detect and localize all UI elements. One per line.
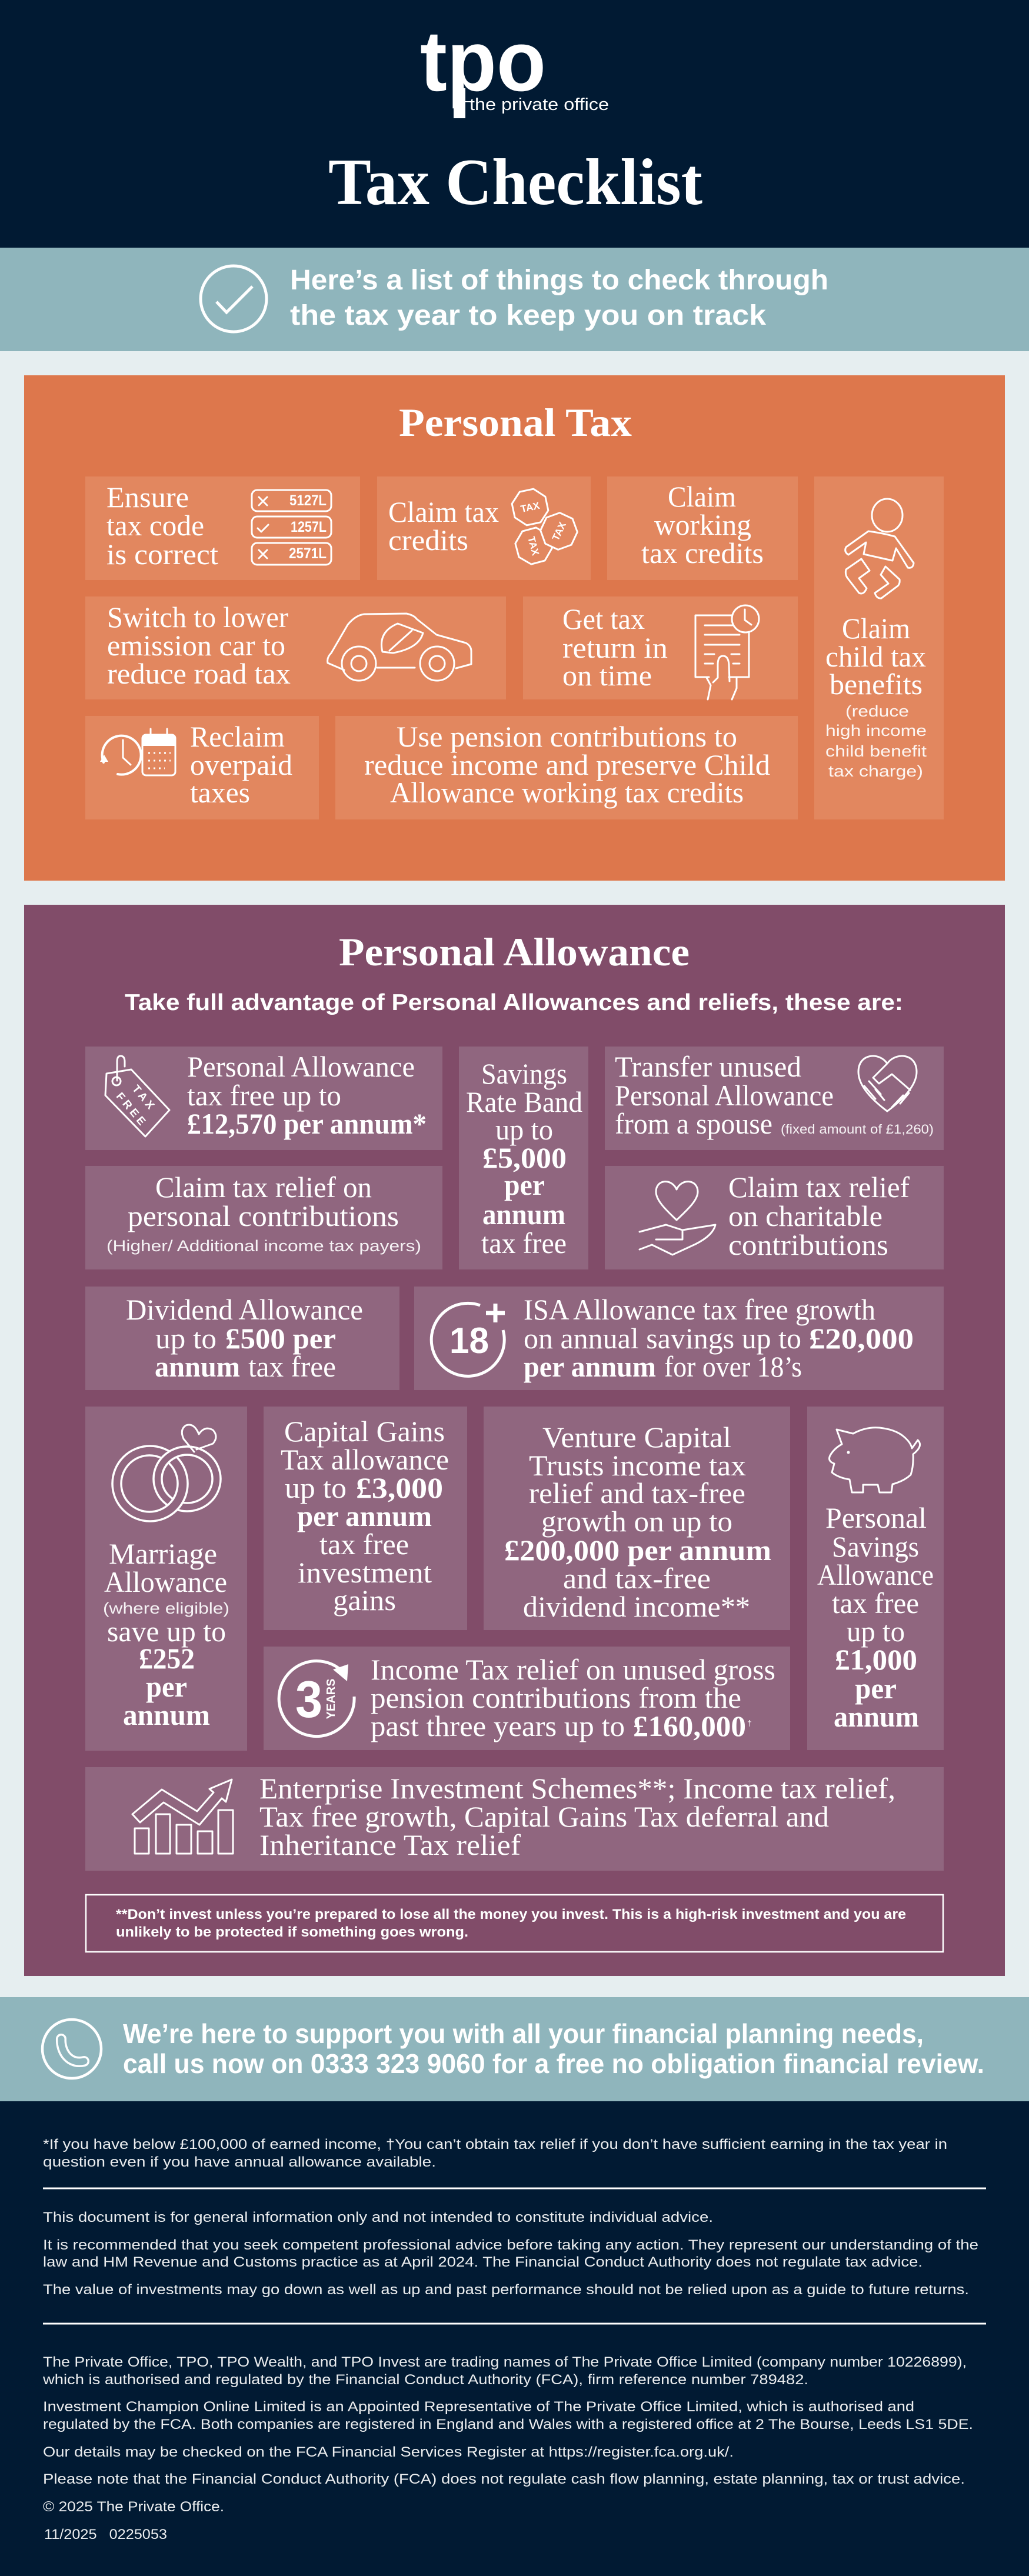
legal text: Please note that the Financial Conduct Authority (FCA) does not regulate cash flow planning, estate planning, tax or trust advice. (43, 2471, 965, 2487)
card: charitable contributions (605, 1166, 944, 1269)
icon: tax code list (252, 490, 331, 565)
card: unused pension relief (264, 1647, 790, 1750)
card: venture capital trusts: growth on up to (541, 1505, 732, 1538)
icon: check circle (201, 266, 267, 332)
card: transfer allowance: from a spouse (615, 1107, 772, 1140)
card: venture capital trusts: £200,000 per annum (504, 1534, 771, 1567)
footnotes: question even if you have annual allowance available. (43, 2154, 436, 2170)
card: transfer allowance: (fixed amount of £1,260) (781, 1122, 934, 1137)
card: tax code (85, 476, 360, 580)
icon: three years (279, 1661, 354, 1737)
card: capital gains allowance: gains (333, 1584, 396, 1617)
card: venture capital trusts: Trusts income tax (529, 1449, 746, 1482)
card: relief on personal contributions: (Higher/ Additional income tax payers) (106, 1237, 421, 1255)
card: child tax benefits: child benefit (825, 742, 927, 760)
card: pension contributions: reduce income and preserve Child (364, 748, 770, 781)
card: isa allowance: per annum (524, 1350, 656, 1383)
card: unused pension relief: past three years up to (371, 1709, 625, 1742)
card: personal savings allowance: up to (847, 1615, 905, 1648)
card: marriage allowance: annum (123, 1698, 210, 1731)
card: unused pension relief: † (747, 1718, 752, 1728)
icon: tax badges: TAX (550, 520, 568, 542)
card: reclaim overpaid taxes (85, 716, 319, 819)
card: child tax benefits: Claim (842, 612, 910, 645)
card: lower emission car: emission car to (107, 629, 285, 662)
card: tax code: is correct (106, 538, 218, 571)
legal text: © 2025 The Private Office. (43, 2499, 224, 2515)
card: savings rate band: Savings (481, 1057, 567, 1090)
card: child tax benefits: benefits (830, 668, 923, 701)
card: capital gains allowance: £3,000 (356, 1471, 443, 1504)
disclaimer: law and HM Revenue and Customs practice as at April 2024. The Financial Conduct Authority does not regulate tax advice. (43, 2254, 923, 2270)
legal text (42, 2354, 973, 2542)
card: capital gains allowance (264, 1407, 467, 1630)
icon: 18 plus (431, 1303, 505, 1376)
card: capital gains allowance: tax free (319, 1528, 409, 1561)
legal text: The Private Office, TPO, TPO Wealth, and TPO Invest are trading names of The Private Office Limited (company number 10226899), (43, 2354, 967, 2370)
card: dividend allowance: tax free (248, 1350, 336, 1383)
card: enterprise investment schemes: Tax free growth, Capital Gains Tax deferral and (259, 1800, 829, 1833)
icon: 18 plus: 18 (449, 1321, 489, 1361)
disclaimer: This document is for general information only and not intended to constitute individual advice. (43, 2210, 713, 2225)
card: working tax credits: working (654, 508, 751, 541)
card: capital gains allowance: investment (298, 1556, 432, 1589)
panel: personal tax (24, 375, 1005, 881)
contact text: We’re here to support you with all your financial planning needs, (123, 2018, 924, 2049)
card: working tax credits: tax credits (641, 536, 764, 569)
disclaimer (43, 2210, 978, 2298)
callout: investment risk warning: **Don’t invest unless you’re prepared to lose all the money you invest. This is a high-risk investment and you are (116, 1907, 906, 1922)
card: enterprise investment schemes: Enterprise Investment Schemes**; Income tax relief, (259, 1772, 895, 1805)
intro text: the tax year to keep you on track (290, 300, 766, 331)
card: working tax credits: Claim (668, 480, 736, 513)
card: venture capital trusts: dividend income** (523, 1590, 750, 1623)
card: dividend allowance (85, 1287, 399, 1390)
card: marriage allowance (85, 1407, 247, 1751)
card: savings rate band: tax free (481, 1227, 567, 1259)
card: personal savings allowance: Allowance (817, 1558, 934, 1591)
legal text: Investment Champion Online Limited is an Appointed Representative of The Private Office Limited, which is authorised and (43, 2399, 914, 2415)
icon: tax badges: TAX (525, 535, 541, 557)
icon: tax badges (510, 487, 582, 567)
card: isa allowance (414, 1287, 944, 1390)
callout: investment risk warning (86, 1895, 943, 1952)
card: marriage allowance: Allowance (104, 1565, 227, 1598)
card: dividend allowance: annum (155, 1350, 240, 1383)
card: relief on personal contributions: personal contributions (128, 1199, 399, 1232)
card: personal allowance amount: £12,570 per annum* (187, 1107, 427, 1140)
callout: investment risk warning: unlikely to be protected if something goes wrong. (116, 1924, 468, 1940)
card: isa allowance: for over 18’s (664, 1350, 802, 1383)
card: tax code: Ensure (106, 481, 189, 514)
icon: heart handshake (858, 1056, 917, 1111)
card: enterprise investment schemes: Inheritance Tax relief (259, 1828, 521, 1861)
header band (0, 0, 1029, 248)
subheading: Take full advantage of Personal Allowances and reliefs, these are: (125, 990, 903, 1015)
card: isa allowance: on annual savings up to (524, 1322, 801, 1355)
disclaimer: It is recommended that you seek competent professional advice before taking any action. They represent our understanding of the (43, 2237, 978, 2253)
logo: tpo the private office: tpo (420, 13, 546, 109)
title: Tax Checklist (328, 146, 702, 219)
icon: growth chart (132, 1779, 233, 1854)
icon: heart in hand (640, 1182, 715, 1255)
card: enterprise investment schemes (85, 1767, 944, 1871)
card: personal savings allowance: £1,000 (835, 1643, 917, 1676)
card: marriage allowance: per (146, 1670, 187, 1703)
card: tax return on time: on time (562, 659, 652, 692)
card: unused pension relief: £160,000 (633, 1709, 746, 1742)
card: dividend allowance: Dividend Allowance (126, 1293, 363, 1326)
card: transfer allowance: Transfer unused (615, 1050, 801, 1083)
card: personal allowance amount: tax free up to (187, 1079, 341, 1112)
card: unused pension relief: Income Tax relief on unused gross (371, 1653, 775, 1686)
card: isa allowance: £20,000 (809, 1322, 914, 1355)
legal text: which is authorised and regulated by the Financial Conduct Authority (FCA), firm reference number 789482. (42, 2372, 808, 2388)
legal text: Our details may be checked on the FCA Financial Services Register at https://register.fca.org.uk/. (43, 2444, 734, 2460)
legal text: regulated by the FCA. Both companies are registered in England and Wales with a registered office at 2 The Bourse, Leeds LS1 5DE. (43, 2417, 973, 2432)
card: claim tax credits (377, 476, 591, 580)
card: capital gains allowance: up to (285, 1471, 347, 1504)
logo: tpo the private office (420, 13, 609, 118)
card: capital gains allowance: Capital Gains (284, 1415, 445, 1448)
card: claim tax credits: Claim tax (388, 495, 499, 528)
card: savings rate band: per (504, 1168, 545, 1201)
card: reclaim overpaid taxes: taxes (190, 776, 250, 809)
card: isa allowance: ISA Allowance tax free growth (524, 1293, 875, 1326)
icon: three years: YEARS (325, 1679, 338, 1719)
icon: phone (42, 2020, 101, 2078)
icon: tax code list: 2571L (289, 545, 327, 562)
card: savings rate band: annum (482, 1198, 565, 1231)
card: personal savings allowance: Personal (825, 1501, 927, 1534)
card: tax return on time (523, 596, 798, 699)
icon: wedding rings (112, 1425, 221, 1521)
card: venture capital trusts: Venture Capital (542, 1421, 731, 1454)
card: savings rate band: up to (495, 1113, 553, 1146)
card: marriage allowance: Marriage (109, 1537, 217, 1570)
card: venture capital trusts: and tax-free (563, 1562, 711, 1595)
card: lower emission car: reduce road tax (107, 657, 291, 690)
card: lower emission car: Switch to lower (107, 601, 288, 634)
card: savings rate band: £5,000 (482, 1141, 567, 1174)
disclaimer: The value of investments may go down as well as up and past performance should not be relied upon as a guide to future returns. (43, 2282, 969, 2298)
icon: tax badges: TAX (520, 500, 541, 515)
card: marriage allowance: (where eligible) (103, 1599, 229, 1617)
card: pension contributions: Allowance working tax credits (390, 776, 744, 809)
card: reclaim overpaid taxes: Reclaim (190, 720, 285, 753)
icon: piggy bank (830, 1428, 920, 1492)
icon: clock and calendar (100, 729, 175, 775)
card: personal savings allowance: tax free (832, 1587, 919, 1619)
card: working tax credits (607, 476, 798, 580)
panel: personal allowance (24, 905, 1005, 1976)
card: charitable contributions: Claim tax relief (728, 1171, 910, 1204)
card: child tax benefits: (reduce (845, 702, 909, 720)
card: dividend allowance: £500 per (225, 1322, 336, 1355)
intro text: Here’s a list of things to check through (290, 265, 828, 296)
card: personal savings allowance: Savings (832, 1530, 919, 1563)
icon: tax free tag (105, 1056, 169, 1137)
card: pension contributions: Use pension contributions to (397, 720, 737, 753)
card: relief on personal contributions (85, 1166, 442, 1269)
heading: personal allowance: Personal Allowance (339, 929, 690, 974)
card: personal savings allowance: annum (834, 1700, 919, 1733)
card: child tax benefits: child tax (825, 640, 926, 673)
intro text (290, 265, 828, 331)
icon: baby (845, 499, 914, 598)
card: capital gains allowance: Tax allowance (281, 1443, 449, 1476)
icon: eco car (328, 614, 471, 681)
card: unused pension relief: pension contributions from the (371, 1681, 741, 1714)
card: tax code: tax code (106, 509, 204, 542)
contact band (0, 1997, 1029, 2101)
card: transfer allowance (605, 1047, 944, 1150)
card: claim tax credits: credits (388, 524, 468, 556)
card: venture capital trusts (484, 1407, 790, 1630)
footnotes (43, 2137, 947, 2170)
icon: tax code list: 5127L (289, 492, 327, 509)
card: child tax benefits (814, 476, 944, 819)
card: personal savings allowance (807, 1407, 944, 1750)
logo: tpo the private office: the private office (469, 95, 609, 114)
icon: tax free tag: TAX (129, 1083, 158, 1114)
icon: three years: 3 (295, 1670, 322, 1728)
card: venture capital trusts: relief and tax-free (529, 1477, 745, 1509)
icon: tax code list: 1257L (291, 519, 327, 535)
card: charitable contributions: contributions (728, 1228, 888, 1261)
contact text: call us now on 0333 323 9060 for a free no obligation financial review. (123, 2048, 984, 2079)
card: dividend allowance: up to (155, 1322, 217, 1355)
card: transfer allowance: Personal Allowance (615, 1079, 834, 1112)
card: pension contributions (335, 716, 798, 819)
card: personal allowance amount: Personal Allowance (187, 1050, 415, 1083)
intro band (0, 248, 1029, 351)
card: personal allowance amount (85, 1047, 442, 1150)
card: child tax benefits: tax charge) (828, 762, 923, 780)
card: relief on personal contributions: Claim tax relief on (155, 1171, 372, 1204)
card: capital gains allowance: per annum (297, 1499, 432, 1532)
card: reclaim overpaid taxes: overpaid (190, 748, 292, 781)
card: lower emission car (85, 596, 506, 699)
heading: personal tax: Personal Tax (399, 400, 632, 445)
card: tax return on time: return in (562, 631, 668, 664)
card: child tax benefits: high income (825, 722, 927, 739)
card: savings rate band: Rate Band (466, 1085, 582, 1118)
legal text: 11/2025 0225053 (44, 2527, 167, 2542)
footer (0, 2101, 1029, 2576)
icon: tax free tag: FREE (114, 1090, 149, 1130)
card: personal savings allowance: per (855, 1672, 897, 1705)
card: marriage allowance: save up to (107, 1615, 226, 1648)
card: charitable contributions: on charitable (728, 1199, 883, 1232)
footnotes: *If you have below £100,000 of earned income, †You can’t obtain tax relief if you don’t have sufficient earning in the tax year in (43, 2137, 947, 2152)
card: marriage allowance: £252 (139, 1642, 195, 1675)
icon: document with clock (695, 605, 759, 699)
card: tax return on time: Get tax (562, 602, 645, 635)
card: savings rate band (459, 1047, 588, 1269)
contact text (123, 2018, 984, 2079)
